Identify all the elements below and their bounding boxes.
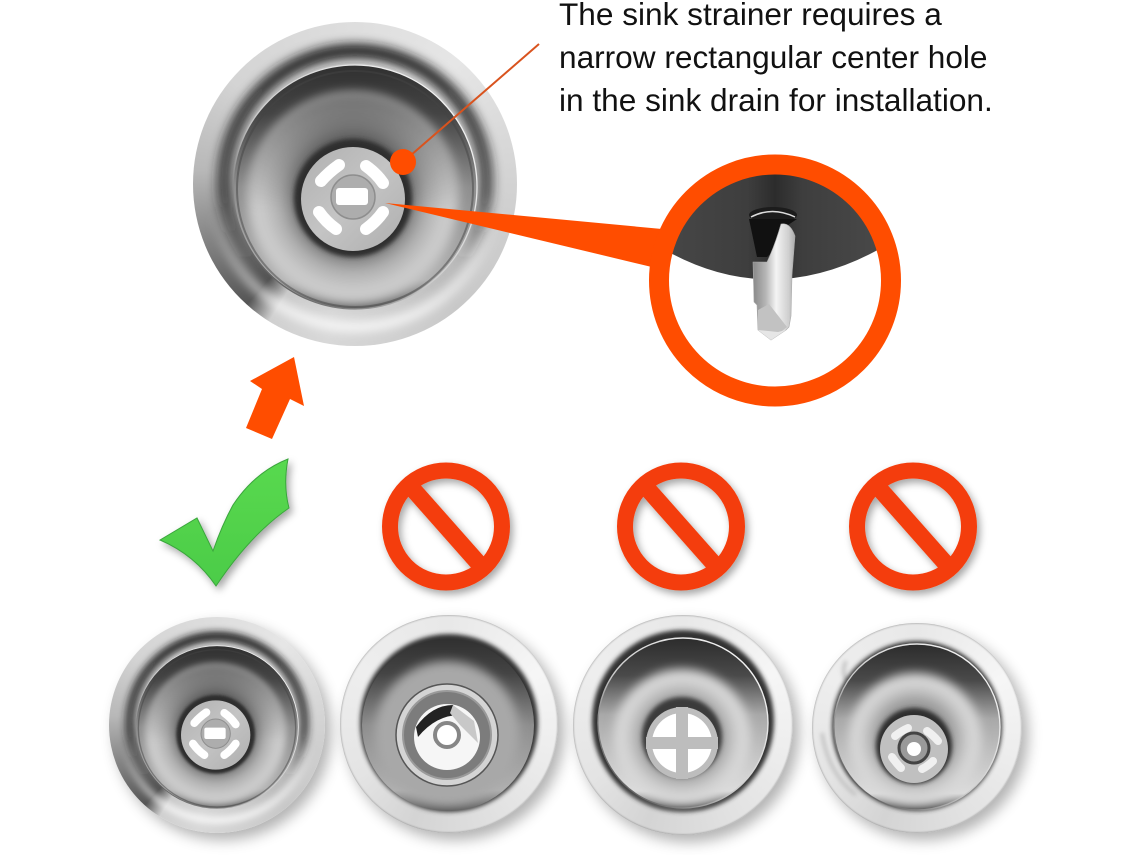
magnifier wedge <box>385 203 662 268</box>
magnified view of strainer stem <box>659 164 891 396</box>
arrow pointing to large drain <box>246 357 304 439</box>
large sink drain photo <box>193 22 517 346</box>
prohibition sign 1 <box>390 470 502 582</box>
bottom drain 4: incompatible round center strainer <box>810 622 1036 848</box>
caption text: narrow rectangular center hole <box>559 39 988 75</box>
prohibition sign 2 <box>625 470 737 582</box>
chrome stem <box>753 224 795 340</box>
caption text: in the sink drain for installation. <box>559 82 993 118</box>
green check mark <box>160 459 289 586</box>
bottom drain 3: incompatible cross strainer <box>571 614 807 850</box>
caption text <box>559 0 993 118</box>
bottom drain 2: incompatible domed strainer <box>338 614 572 848</box>
magnifier ring <box>659 164 891 396</box>
bottom drain 1: correct rectangular hole <box>107 616 339 848</box>
prohibition sign 3 <box>857 470 969 582</box>
leader line and pointer dot <box>390 44 539 175</box>
stem collar <box>749 207 797 223</box>
